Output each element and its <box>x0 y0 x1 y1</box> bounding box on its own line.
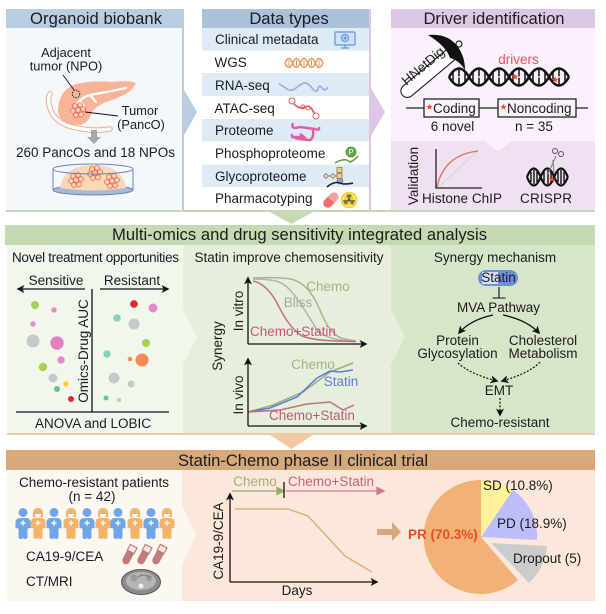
label: pr: PR (70.3%) <box>408 527 478 542</box>
text: organoid counts: 260 PancOs and 18 NPOs <box>16 145 175 160</box>
row labels: RNA-seq <box>215 78 270 93</box>
icon: pancreas <box>48 75 136 130</box>
label: synergy: Synergy <box>210 321 225 371</box>
heading: clinical trial <box>6 450 595 470</box>
label: n = 35: n = 35 <box>515 119 553 134</box>
label: imaging: CT/MRI <box>26 574 72 589</box>
divider and arrow: to integrated analysis <box>6 210 595 224</box>
tick <box>283 482 285 498</box>
icon: dna strand <box>449 68 569 86</box>
label: patients: Chemo-resistant patients <box>19 475 169 490</box>
arrows: mva branches <box>459 315 539 333</box>
icon: protein <box>291 123 319 140</box>
icon: atac <box>289 98 319 119</box>
icon: rna <box>279 83 328 91</box>
label: chemo: Chemo <box>291 357 335 372</box>
diagram: coding and noncoding track <box>406 99 588 117</box>
row labels <box>214 32 325 206</box>
label: tumor: Tumor <box>122 103 158 118</box>
label: emt: EMT <box>485 383 513 398</box>
arrow: data types to driver <box>371 88 385 136</box>
panel: clinical trial <box>6 450 595 601</box>
arrow: to clinical trial <box>270 435 313 449</box>
icon: pill <box>321 190 341 210</box>
icons: patients <box>16 508 174 539</box>
subpanel: novel treatment opportunities <box>12 250 179 431</box>
subpanel: synergy mechanism <box>417 250 578 430</box>
arrow: chemo phase <box>232 488 284 494</box>
icon: glycan <box>324 168 353 187</box>
label: chemo+statin: Chemo+Statin <box>269 408 355 423</box>
subpanel: biomarker chart <box>211 474 384 598</box>
subpanel: statin chemosensitivity <box>194 250 384 426</box>
chart: histone chip <box>436 149 482 188</box>
label: bliss: Bliss <box>284 295 312 310</box>
row labels: ATAC-seq <box>214 101 275 116</box>
label: in vitro: In vitro <box>231 291 246 331</box>
icon: pickaxe: HNetDig <box>399 44 447 88</box>
label: drivers: drivers <box>498 52 539 67</box>
icon: ct scan <box>122 570 160 594</box>
label: resistant: Resistant <box>104 273 160 288</box>
chart: in vitro <box>248 278 366 344</box>
subheading: Synergy mechanism <box>434 250 556 265</box>
label: chemo+statin: Chemo+Statin <box>250 324 336 339</box>
label: chemo: Chemo <box>306 279 350 294</box>
chart: response pie <box>408 478 581 594</box>
icons: blood tubes <box>121 544 167 566</box>
pill: statin: Statin <box>481 270 516 285</box>
label: biomarkers: CA19-9/CEA <box>26 549 103 564</box>
diagram: coding and noncoding track: Noncoding <box>507 101 572 116</box>
chart: in vivo <box>248 359 366 426</box>
panel: data types <box>202 9 371 210</box>
panel: integrated analysis <box>5 225 595 435</box>
label: cholesterol metabolism: Metabolism <box>508 346 578 361</box>
heading: integrated analysis: Multi-omics and drug sensitivity integrated analysis <box>112 225 487 244</box>
label: y axis: CA19-9/CEA <box>211 502 226 580</box>
icon: culture dish <box>53 164 133 195</box>
label: histone chip: Histone ChIP <box>422 191 502 206</box>
label: days: Days <box>282 583 313 598</box>
label: validation: Validation <box>406 147 421 205</box>
icon: dna <box>285 58 323 68</box>
label: chemo+statin phase: Chemo+Statin <box>288 474 374 489</box>
heading: integrated analysis <box>5 225 595 245</box>
label: x axis: ANOVA and LOBIC <box>35 416 151 431</box>
heading: data types <box>202 9 369 28</box>
arrow: down <box>87 130 101 144</box>
label: chemo phase: Chemo <box>233 474 277 489</box>
label: patients: (n = 42) <box>69 489 115 504</box>
scatter axes <box>16 289 169 412</box>
scatter dots <box>26 300 158 402</box>
heading: data types: Data types <box>249 9 329 28</box>
heading: organoid biobank: Organoid biobank <box>30 9 163 28</box>
row labels: Pharmacotyping <box>215 191 313 206</box>
icon: crispr <box>527 148 568 186</box>
icon: phospho <box>335 146 358 163</box>
label: adjacent tumor: tumor (NPO) <box>30 58 102 74</box>
label: pd: PD (18.9%) <box>497 516 567 531</box>
inhibition bar <box>492 287 506 298</box>
chart: ca19-9 trend <box>230 494 377 582</box>
row labels: WGS <box>214 55 247 70</box>
label: statin: Statin <box>324 374 358 389</box>
panel: driver identification <box>391 9 595 210</box>
label: dropout: Dropout (5) <box>513 551 581 566</box>
row labels: Proteome <box>215 123 274 138</box>
row labels: Glycoproteome <box>215 169 307 184</box>
row labels: Phosphoproteome <box>215 146 325 161</box>
heading: driver identification <box>391 9 595 28</box>
arrow: organoid to data types <box>184 90 197 135</box>
diagram: coding and noncoding track: Coding <box>433 101 476 116</box>
label: tumor: (PancO) <box>117 117 165 132</box>
label: sd: SD (10.8%) <box>483 478 553 493</box>
panel: organoid biobank <box>6 9 184 210</box>
label: sensitive: Sensitive <box>29 273 83 288</box>
label: y axis: Omics-Drug AUC <box>76 299 91 403</box>
label: 6 novel: 6 novel <box>431 119 474 134</box>
icon: pickaxe <box>398 35 465 100</box>
label: mva pathway: MVA Pathway <box>457 300 540 315</box>
row labels: Clinical metadata <box>215 32 319 47</box>
arrow: to response <box>377 522 401 541</box>
label: cholesterol metabolism: Cholesterol <box>509 333 577 348</box>
icon: radiation <box>341 192 357 208</box>
heading: clinical trial: Statin-Chemo phase II clinical trial <box>178 451 428 470</box>
label: adjacent tumor: Adjacent <box>41 45 91 60</box>
label: protein glycosylation: Protein <box>436 333 479 348</box>
arrow: chemo+statin phase <box>286 488 384 494</box>
label: chemo-resistant: Chemo-resistant <box>450 415 550 430</box>
subheading: Statin improve chemosensitivity <box>194 250 384 265</box>
heading: driver identification: Driver identification <box>423 9 565 28</box>
icon: phospho: P <box>348 148 354 157</box>
arrows: dotted to emt <box>458 362 540 415</box>
subpanel: patients <box>16 475 174 594</box>
icon: monitor <box>335 32 355 48</box>
label: protein glycosylation: Glycosylation <box>417 346 498 361</box>
label: in vivo: In vivo <box>231 375 246 415</box>
label: crispr: CRISPR <box>520 191 572 206</box>
subheading: Novel treatment opportunities <box>12 250 179 265</box>
